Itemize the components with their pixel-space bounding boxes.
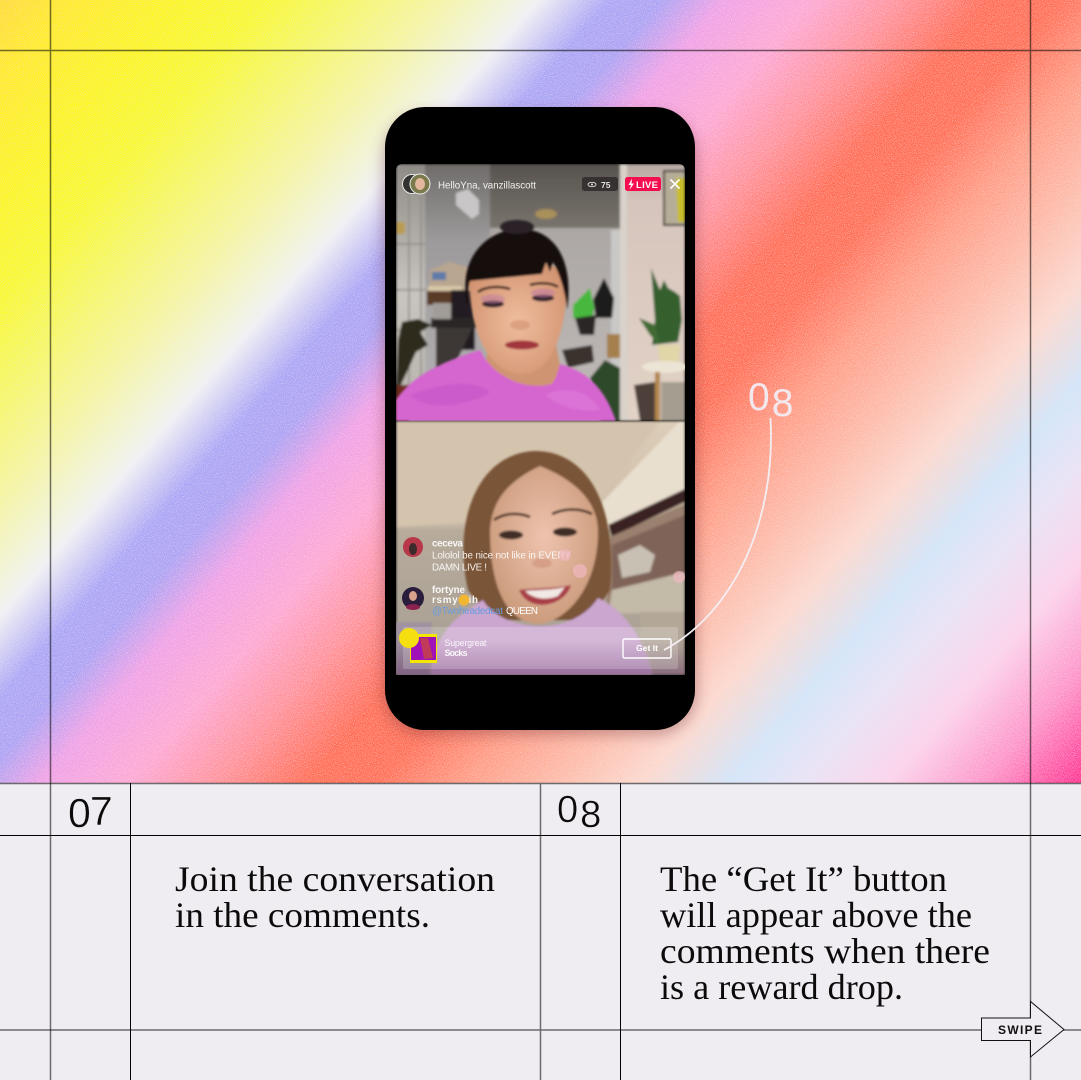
caption: step 07: in the comments. [175,895,430,935]
comment mention: QUEEN [506,606,538,617]
live badge: LIVE [636,180,658,191]
face [469,259,567,374]
comment text: ceceva [432,538,464,550]
product label: Supergreat [444,638,487,648]
viewer count: 75 [601,180,611,190]
caption: step 08: is a reward drop. [660,967,903,1007]
comment text: rsmyo ih [432,595,478,606]
arrow: swipe: SWIPE [998,1023,1042,1037]
caption: step 08 [660,859,990,1007]
live badge [625,177,661,191]
comment mention: @Twoheadedcat [432,606,503,617]
hair [463,451,611,620]
gradient background [0,0,1081,784]
video: bottom speaker [396,421,685,675]
step number 07: 7 [90,788,113,834]
header: live bar [402,174,680,194]
caption: step 08: will appear above the [660,895,972,935]
eyes [482,300,504,308]
bottom caption panel [0,783,1081,1080]
floating hearts [559,549,685,583]
comment text: fortyne [432,585,466,596]
icon: emoji [458,594,470,606]
icon: close [670,180,680,188]
step number 08: 0 [557,789,578,831]
yellow coin [399,628,419,648]
neck [486,346,560,387]
comment: ceceva [403,537,571,574]
arrow: swipe [982,1002,1064,1057]
avatar: ceceva [403,537,423,557]
callout number 08: 8 [772,382,793,425]
caption: step 08: comments when there [660,931,990,971]
get it button [623,639,671,658]
hair [465,229,568,310]
callout number 08: 0 [748,376,770,419]
shirt [396,350,616,421]
caption: step 07 [175,859,495,935]
avatar: fortyne [402,587,424,610]
product thumbnail [410,634,437,663]
nose [532,558,552,568]
phone body [385,107,695,730]
product label: Socks [444,648,468,658]
hair bun [500,220,534,234]
nose [510,320,530,330]
hoodie [430,598,652,675]
step number 08: 8 [580,794,601,836]
mouth [505,340,539,350]
bar background [403,627,678,669]
comment text: Lololol be nice not like in EVERY [432,550,571,562]
comment: fortyne [402,585,538,617]
arrow: callout curve to Get It button [664,418,771,650]
video: top speaker [396,164,688,421]
viewer count [582,177,618,191]
comment text: DAMN LIVE ! [432,562,487,574]
reward drop bar [399,627,678,669]
step number 07: 0 [68,790,91,836]
caption: step 08: The “Get It” button [660,859,947,899]
usernames: HelloYna, vanzillascott [438,180,536,192]
brows and eyes [494,510,592,520]
mouth [519,585,571,605]
phone shadow [383,113,697,735]
face [490,466,598,624]
icon: user avatars [402,174,430,194]
phone [385,107,695,730]
caption: step 07: Join the conversation [175,859,495,899]
get it button: Get It [636,643,658,653]
